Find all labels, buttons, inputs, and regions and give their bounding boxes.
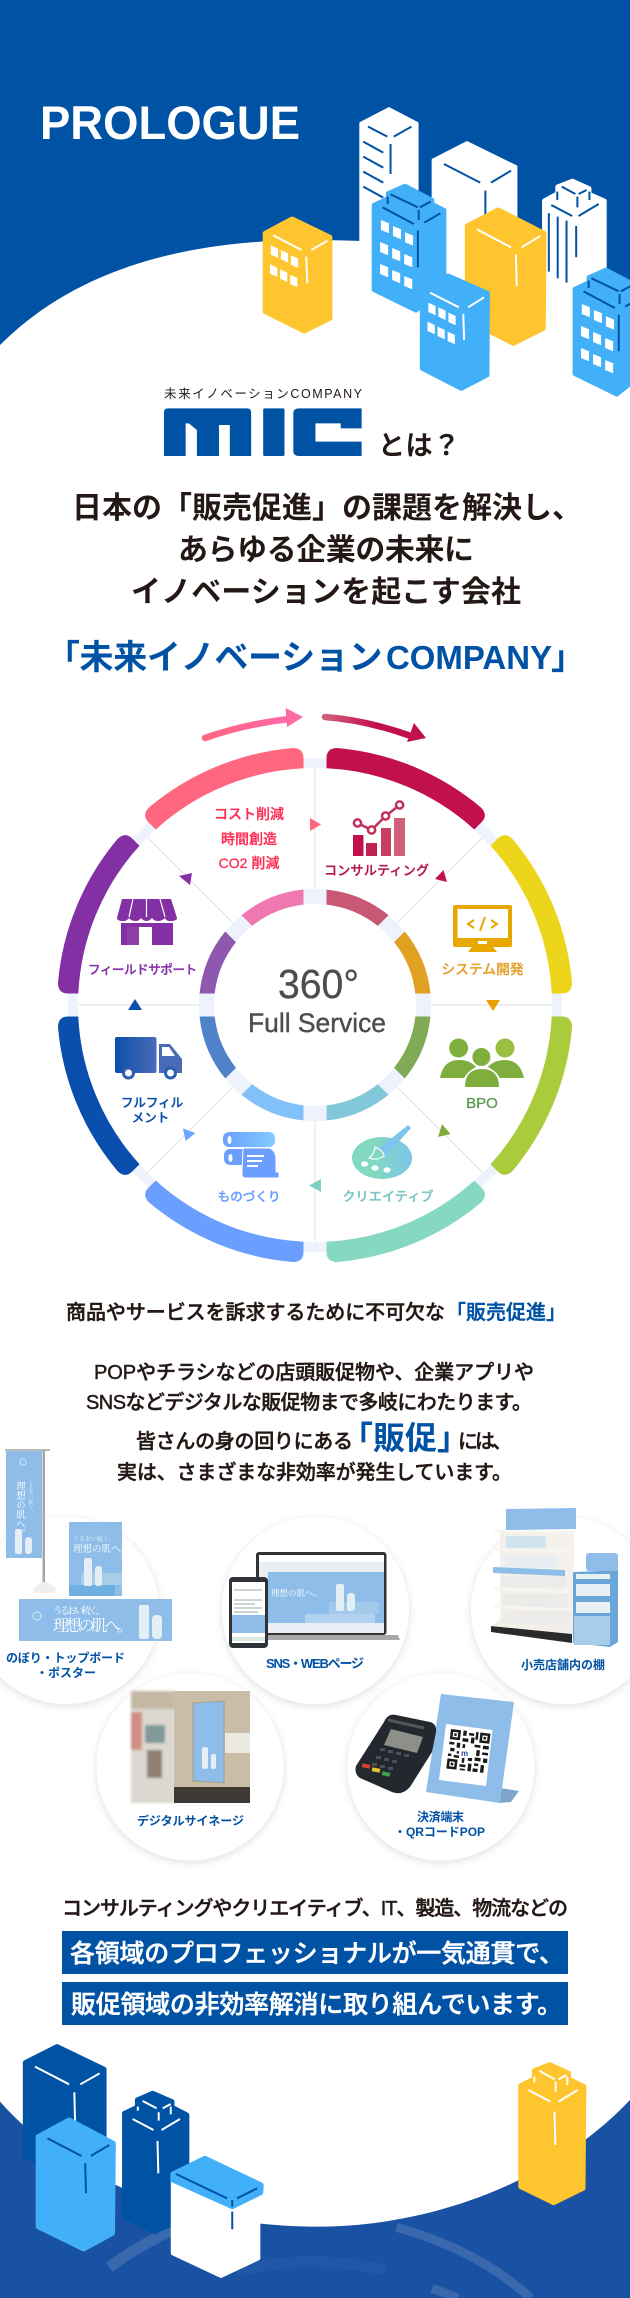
top board [19,1599,172,1641]
chart: 360 degree service wheel [13,703,617,1307]
segment: fulfillment [115,1037,183,1125]
text block: closing lead: コンサルティングやクリエイティブ、IT、製造、物流などの [62,1896,568,1920]
text block: explanation: POPやチラシなどの店頭販促物や、企業アプリや [94,1361,534,1384]
QR code POP stand: m [461,1749,468,1758]
building: large yellow [467,210,544,343]
outer ring segments [13,703,617,1307]
center label: 360° [278,961,359,1007]
callout: first line: 各領域のプロフェッショナルが一気通貫で、 [70,1940,564,1968]
text block: explanation: 」 [437,1420,469,1456]
segment: fulfillment: メント [132,1111,169,1125]
subheading: 未来イノベーション [80,639,382,677]
label: デジタルサイネージ [137,1813,244,1828]
callout: second line [62,1982,568,2025]
segment: manufacturing: ものづくり [218,1190,280,1204]
title: PROLOGUE [40,96,300,149]
heading: イノベーションを起こす会社 [131,576,521,609]
segment: system development: システム開発 [441,962,524,977]
panel: payment terminal and QR POP [348,1674,534,1860]
top board: 理想の肌へ。 [53,1616,133,1635]
segment: fulfillment: フルフィル [121,1096,183,1110]
text block: sales promotion intro: 「販売促進」 [446,1301,566,1324]
footer background [0,2100,630,2298]
callout: first line [62,1931,568,1974]
segment: creative [342,1125,434,1204]
text block: explanation: には、 [458,1431,512,1453]
poster [69,1522,130,1596]
icon: rolls and paper [223,1132,279,1178]
poster: 理想の肌へ。 [73,1543,130,1555]
building: navy tall [25,2047,104,2173]
building: blue tower [374,186,444,311]
label: 決済端末 [417,1809,464,1824]
segment: system development [441,905,524,977]
label: SNS・WEBページ [266,1656,364,1671]
spoke arrows [128,818,500,1192]
segment: cost reduction text: CO2 削減 [219,855,279,871]
icon: people [440,1038,524,1087]
text block: explanation [86,1361,534,1484]
segment: cost reduction text [214,806,284,871]
building: white tower 3 [544,181,605,300]
banner flag: うるおい続く、 [28,1479,33,1515]
building: blue tower right [575,270,630,395]
text block: sales promotion intro: 商品やサービスを訴求するために不可欠な [66,1301,445,1324]
top board: うるおい続く、 [53,1605,105,1617]
label [6,1651,125,1680]
icon: bar chart [353,801,405,856]
building: white tower 2 [433,143,516,300]
label: のぼり・トップボード [6,1651,125,1665]
top arrows [205,708,426,742]
tagline above logo: 未来イノベーションCOMPANY [164,387,363,401]
segment: consulting [324,801,429,878]
text block: explanation: 皆さんの身の回りにある [136,1430,353,1453]
building: white tower 1 [361,109,417,267]
building: yellow with roof box [521,2065,584,2203]
segment: field support [88,899,197,977]
label [394,1809,485,1839]
center label [248,961,386,1038]
center label: Full Service [248,1008,386,1038]
shelf [491,1508,576,1643]
segment: cost reduction text: コスト削減 [214,806,284,822]
subheading: COMPANY [386,639,552,676]
illustration: isometric city [265,109,630,395]
poster: うるおい続く、 [73,1535,115,1543]
footer illustration: city on curve [0,2047,630,2298]
logo suffix: とは？ [378,431,460,461]
laptop [256,1552,400,1640]
text block: explanation: SNSなどデジタルな販促物まで多岐にわたります。 [86,1390,532,1414]
display stand [573,1553,618,1647]
building: white with blue lid [173,2158,261,2276]
subheading: 「 [46,639,80,677]
segment: creative: クリエイティブ [342,1189,434,1204]
panel: banners and posters [0,1449,172,1704]
signage photo [131,1691,250,1803]
segment: BPO [440,1038,524,1112]
banner flag: 理想の肌へ。 [14,1481,26,1538]
icon: palette [352,1125,412,1179]
subheading: 」 [551,639,585,677]
payment terminal [356,1715,436,1793]
building: small blue [422,276,487,388]
building: small yellow [265,219,330,331]
panel: digital signage [96,1674,284,1860]
QR code POP stand [426,1694,519,1803]
segment: consulting: コンサルティング [324,863,429,878]
inner ring segments [181,871,449,1139]
segment: manufacturing [218,1132,280,1204]
label: ・ポスター [36,1666,96,1680]
callout: second line: 販促領域の非効率解消に取り組んでいます。 [71,1991,562,2019]
segment: cost reduction text: 時間創造 [221,831,277,847]
icon: truck [115,1037,182,1078]
label: ・QRコードPOP [394,1825,485,1839]
segment: field support: フィールドサポート [88,963,197,977]
building: navy with roof box [125,2093,187,2232]
icon: monitor [453,905,512,952]
text block: explanation: 販促 [373,1420,437,1456]
laptop: 理想の肌へ。 [271,1588,322,1598]
banner flag [5,1449,57,1593]
subheading [46,639,585,677]
text block: explanation: 「 [341,1420,373,1456]
segment: BPO: BPO [466,1095,498,1112]
text block: explanation: 実は、さまざまな非効率が発生しています。 [117,1460,512,1484]
wheel rings and spokes [13,703,617,1307]
panel: retail shelf [471,1508,630,1704]
label: 小売店舗内の棚 [521,1657,605,1672]
heading [72,492,582,609]
panel: SNS and web pages [222,1517,409,1704]
building: light blue [38,2120,113,2249]
heading: 日本の「販売促進」の課題を解決し、 [72,492,582,525]
header background [0,0,630,345]
heading: あらゆる企業の未来に [178,534,474,567]
logo: MIC [164,408,362,456]
smartphone [229,1577,268,1648]
icon: store [117,899,177,945]
